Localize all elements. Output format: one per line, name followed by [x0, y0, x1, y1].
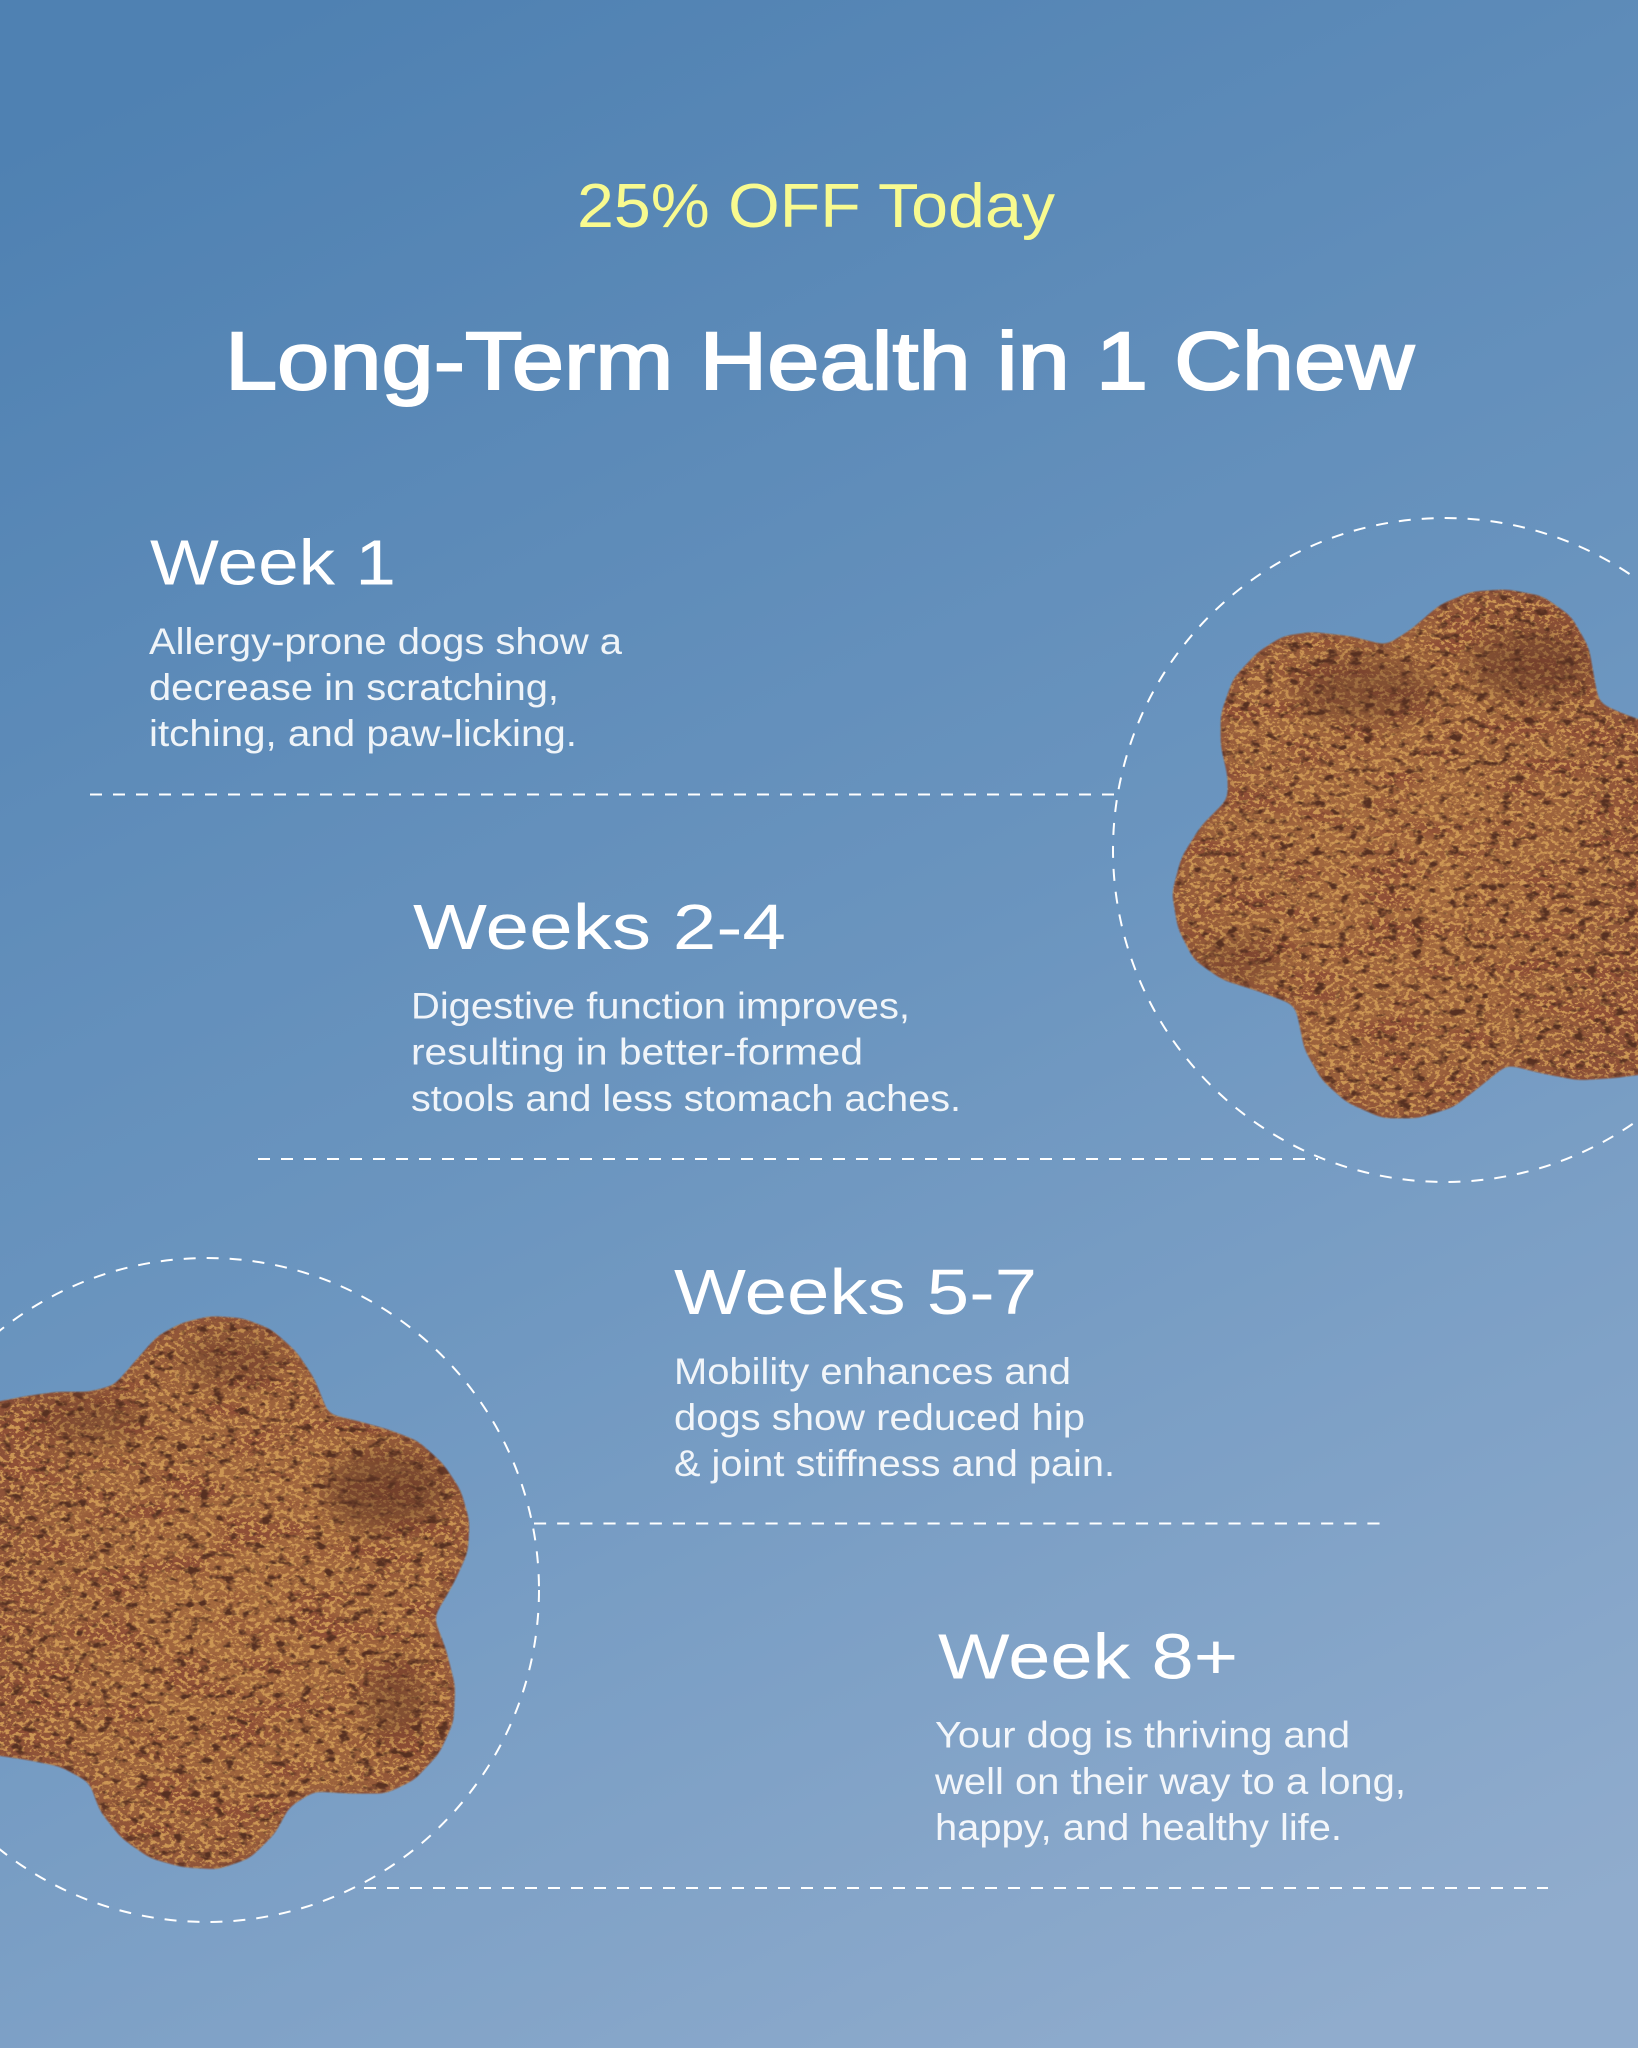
step: week 1 — [149, 526, 622, 754]
step: week 8+: well on their way to a long, — [934, 1761, 1406, 1802]
dashed dividers — [90, 794, 1548, 1888]
dashed circle: upper right — [1113, 518, 1638, 1182]
step: week 8+: happy, and healthy life. — [935, 1807, 1342, 1848]
step: weeks 2-4: Weeks 2-4 — [413, 891, 786, 963]
step: week 1: itching, and paw-licking. — [149, 713, 577, 754]
step: weeks 5-7: Mobility enhances and — [674, 1351, 1071, 1392]
step: weeks 5-7: dogs show reduced hip — [674, 1397, 1085, 1438]
step: weeks 2-4: Digestive function improves, — [411, 986, 910, 1026]
step: weeks 2-4 — [411, 891, 961, 1119]
step: week 8+: Your dog is thriving and — [935, 1714, 1350, 1756]
promo line: 25% OFF Today — [577, 172, 1055, 241]
step: weeks 5-7 — [674, 1256, 1115, 1484]
step: weeks 2-4: resulting in better-formed — [411, 1032, 863, 1072]
step: week 1: decrease in scratching, — [149, 667, 559, 708]
step: weeks 2-4: stools and less stomach aches. — [411, 1078, 961, 1119]
step: week 1: Week 1 — [150, 526, 396, 598]
title: Long-Term Health in 1 Chew — [225, 316, 1415, 407]
step: weeks 5-7: & joint stiffness and pain. — [674, 1443, 1115, 1484]
dashed circle: lower left — [0, 1258, 539, 1922]
step: weeks 5-7: Weeks 5-7 — [674, 1256, 1037, 1328]
step: week 8+ — [934, 1620, 1406, 1848]
chew: upper right — [1160, 580, 1638, 1130]
step: week 8+: Week 8+ — [938, 1620, 1238, 1692]
chew: lower left — [0, 1310, 480, 1880]
step: week 1: Allergy-prone dogs show a — [149, 621, 622, 662]
